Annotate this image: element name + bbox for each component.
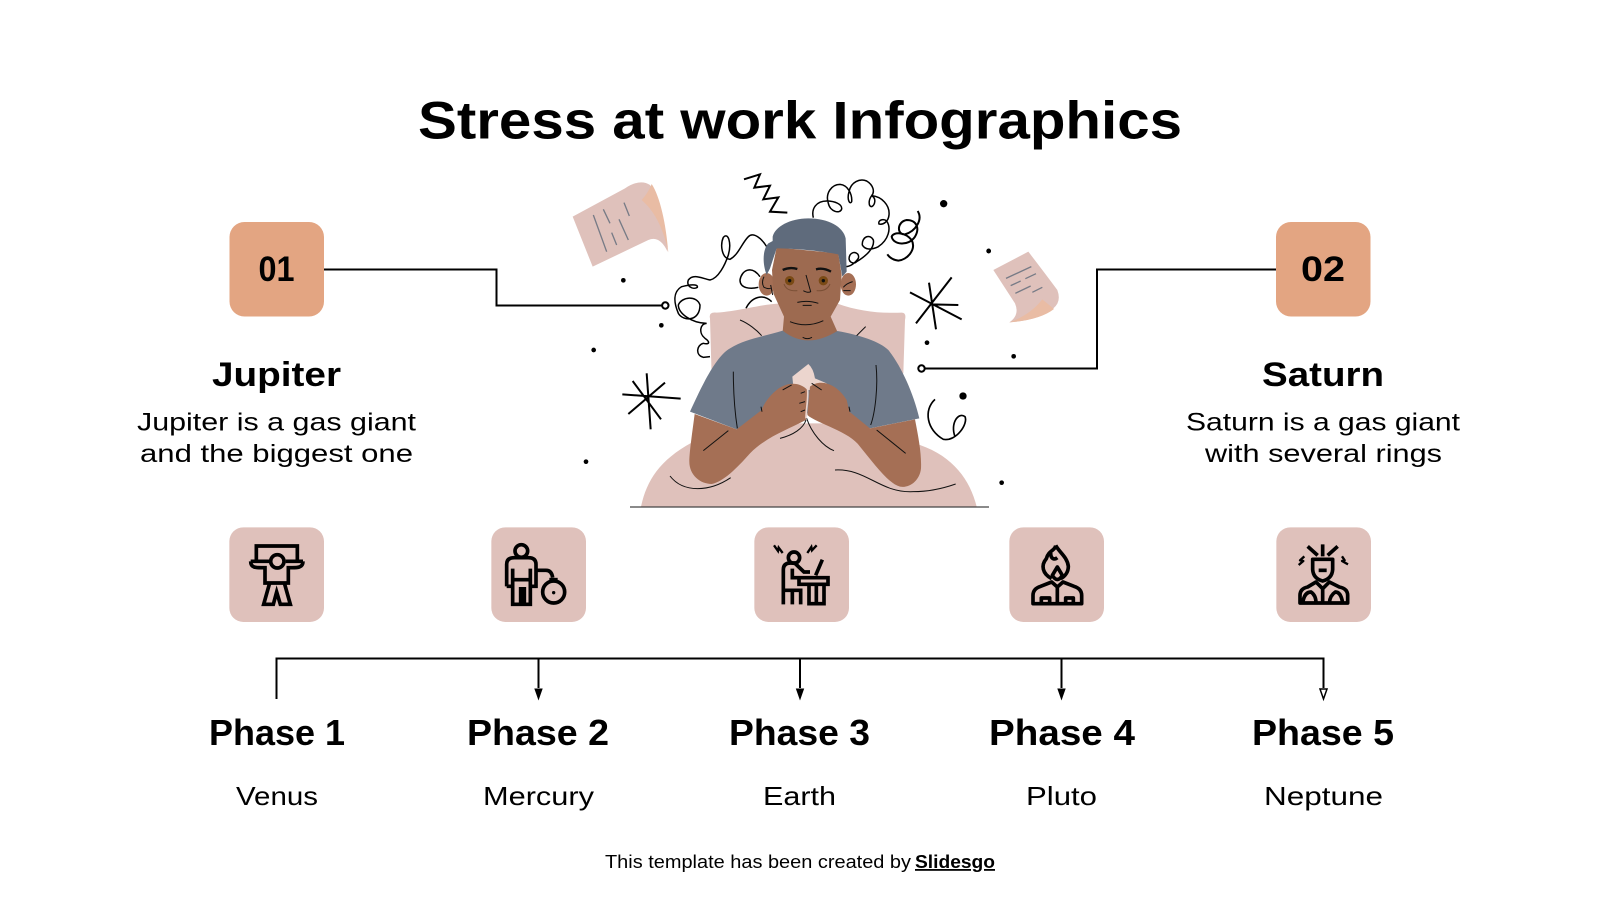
text: Jupiter description: Jupiter is a gas giant <box>137 408 416 436</box>
number badge 01 <box>230 222 324 316</box>
phase 2 label: Mercury <box>483 781 594 811</box>
illustration: dots <box>584 200 1016 485</box>
illustration: asterisk left <box>622 373 681 429</box>
number badge 01: 01 <box>258 250 294 289</box>
phase 3 label: Phase 3 <box>729 712 870 753</box>
phase 4 label: Phase 4 <box>989 712 1135 753</box>
illustration: hair <box>764 218 847 277</box>
number badge 02: 02 <box>1301 250 1345 289</box>
timeline connector with arrows <box>276 658 1327 699</box>
phase 2 label <box>467 712 609 811</box>
icon tile: person holding board <box>229 527 324 622</box>
icon tile: person with flaming head <box>1009 527 1104 622</box>
heading: Jupiter: Jupiter <box>212 356 341 394</box>
illustration: tissue gap between fists <box>806 387 808 418</box>
illustration: bed line <box>630 505 989 509</box>
illustration: floating paper left <box>573 182 668 267</box>
title: Stress at work Infographics <box>418 92 1182 150</box>
footer credit: This template has been created by <box>605 852 911 872</box>
phase 5 label <box>1252 712 1394 811</box>
phase 3 label <box>729 712 870 811</box>
text: Jupiter description: and the biggest one <box>140 440 413 468</box>
illustration: stressed man in bed <box>573 174 1059 507</box>
illustration: asterisk right <box>910 277 962 329</box>
footer credit: Slidesgo <box>915 852 995 872</box>
illustration: facial features <box>762 268 853 339</box>
illustration: zigzag and curly scribbles top right <box>744 174 920 267</box>
phase 1 label <box>209 712 345 811</box>
illustration: clothing and blanket lines <box>670 320 956 492</box>
heading: Saturn: Saturn <box>1262 356 1384 394</box>
illustration: curl <box>928 399 966 440</box>
text: Saturn description <box>1186 408 1460 468</box>
connector: 01 to illustration <box>324 270 668 309</box>
illustration: pillow <box>710 303 905 377</box>
icon tile: person chained to bomb <box>491 527 586 622</box>
phase 1 label: Phase 1 <box>209 712 345 753</box>
illustration: shirt <box>690 331 919 429</box>
phase 2 label: Phase 2 <box>467 712 609 753</box>
phase 1 label: Venus <box>236 781 318 811</box>
phase 5 label: Neptune <box>1264 781 1383 811</box>
illustration: arms and hands <box>689 383 921 487</box>
illustration: blanket <box>641 423 977 507</box>
connector: 02 to illustration <box>918 270 1276 372</box>
panel: Saturn <box>1186 222 1460 468</box>
phase 4 label: Pluto <box>1026 781 1097 811</box>
icon tile: person stressed at desk <box>754 527 849 622</box>
illustration: tissue <box>792 364 827 390</box>
icon tile: person with exploding head <box>1276 527 1371 622</box>
text: Jupiter description <box>137 408 416 468</box>
illustration: floating paper right <box>986 249 1059 322</box>
phase 4 label <box>989 712 1135 811</box>
phase 5 label: Phase 5 <box>1252 712 1394 753</box>
illustration: face and neck <box>772 247 842 341</box>
illustration: curly scribble left <box>675 235 772 357</box>
number badge 02 <box>1276 222 1370 316</box>
illustration: ears <box>759 273 856 296</box>
text: Saturn description: Saturn is a gas giant <box>1186 408 1460 436</box>
phase 3 label: Earth <box>763 781 836 811</box>
panel: Jupiter <box>137 222 416 468</box>
text: Saturn description: with several rings <box>1204 440 1442 468</box>
